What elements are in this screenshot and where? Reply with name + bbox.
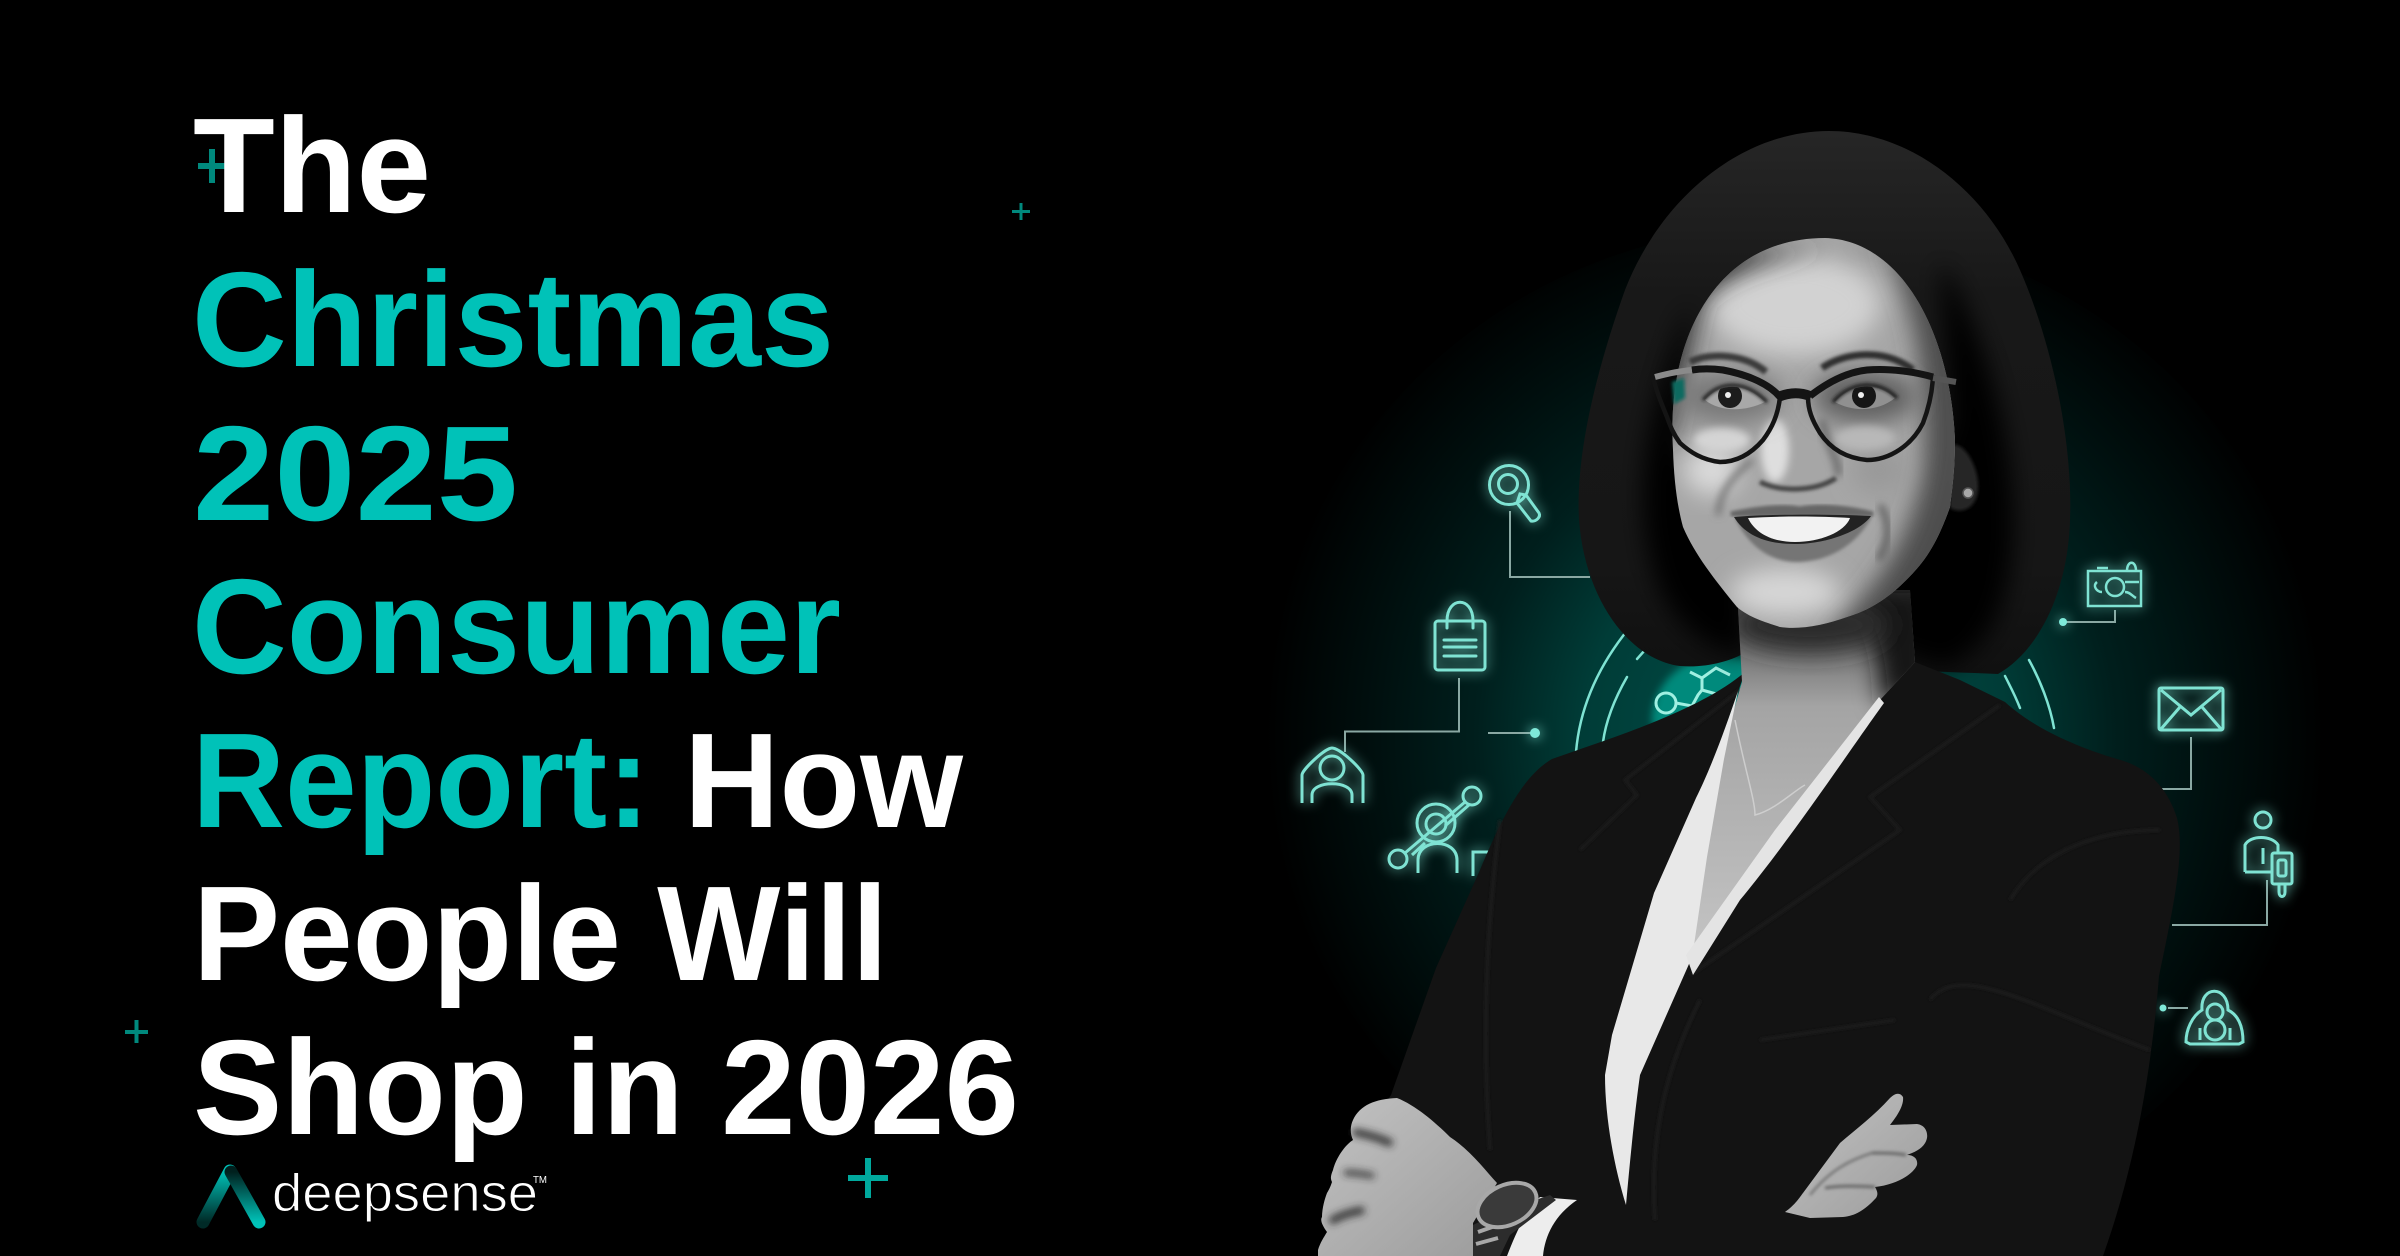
blouse right strip [1686,697,1884,975]
plus sign top [1012,203,1030,220]
glasses [1653,369,1956,462]
forehead highlight [1710,255,1880,355]
hair inner shadow right [1860,260,2014,668]
icon: person with phone [2245,812,2292,896]
left eye [1703,384,1767,409]
line: Shop in 2026: Shop in 2026 [193,1012,1019,1163]
icon: node person [1389,787,1490,876]
line: Christmas: Christmas [192,244,834,395]
neck and chest [1694,590,1915,944]
logo [202,1164,547,1223]
lower lens highlight left [1694,428,1750,452]
left lens top rim [1655,370,1692,377]
right cheek highlight [1861,454,1898,487]
icon: calendar [2088,563,2141,606]
heading [192,90,1019,1163]
arcs right [2005,660,2054,728]
line: Consumer: Consumer [192,551,841,702]
logo mark [202,1171,259,1222]
wordmark: deepsense [272,1164,538,1223]
icon: magnifier [1490,466,1539,521]
right eye [1833,384,1897,409]
mouth interior [1734,515,1871,544]
earring [1963,488,1973,498]
ear [1950,444,1978,511]
background glow [1265,225,2325,1245]
jacket [1330,662,2180,1256]
neck right shadow [1859,590,1915,710]
line: People Will: People Will [193,858,888,1009]
lens shading right [1813,371,1917,423]
blouse left [1605,691,1738,1205]
right side shading [1821,256,1955,624]
left cheek highlight [1684,445,1740,495]
nostril shadow [1760,478,1836,489]
forehead top shadow [1672,238,1824,452]
line: 2025: 2025 [193,398,518,549]
left lens frame [1653,369,1780,462]
connector lines [1345,511,2267,1008]
chin highlight [1730,568,1840,616]
hair [1579,131,2070,674]
left brow [1690,356,1766,372]
central network graphic [1576,632,2054,752]
top rim right [1810,369,1933,396]
icon: envelope [2159,688,2223,730]
line: Report:: Report: [192,705,650,856]
shirt cuff [1507,1197,1577,1256]
lower lip [1735,516,1872,562]
temple [1933,378,1956,382]
watch band links [1476,1226,1498,1244]
molecule icon [1656,668,1730,714]
finger gaps [1330,1132,1392,1222]
face base [1672,238,1955,628]
nose highlight [1761,418,1789,482]
molecule backdrop [1652,652,1750,735]
line: How: How [684,705,964,856]
mouth [1731,507,1873,562]
person portrait [1318,131,2180,1256]
right brow [1822,355,1913,370]
finger gaps [1810,1153,1906,1195]
plus sign left [125,1020,148,1043]
left lens top rim dark [1692,369,1780,397]
icon: person in arch [1302,748,1363,803]
bridge [1778,393,1810,397]
nose side shadow [1822,420,1838,476]
icon: shopping bag [1435,602,1485,670]
icon: hooded person [2186,991,2243,1044]
teal lens glint [1672,378,1685,404]
plus sign bottom [848,1158,888,1198]
teeth [1748,516,1850,542]
connector dots [1530,618,2166,1012]
left hand [1318,1098,1497,1256]
watch [1471,1174,1556,1256]
hair inner shadow left [1643,300,1745,655]
smile line left [1718,460,1752,515]
decorative plus behind title [198,149,225,183]
upper lip [1731,507,1873,514]
right lens frame [1808,369,1933,460]
necklace [1735,720,1805,815]
smile line right [1878,505,1887,560]
under chin shadow [1730,597,1890,653]
line: The: The [193,90,431,241]
lens shading left [1678,371,1782,423]
trademark: TM [533,1175,547,1186]
watch face [1471,1174,1543,1236]
arcs left [1576,632,1645,752]
jacket fold lines [1486,690,2160,1220]
lower lens highlight right [1835,426,1895,450]
face [1654,238,1956,628]
right hand [1785,1094,1927,1218]
